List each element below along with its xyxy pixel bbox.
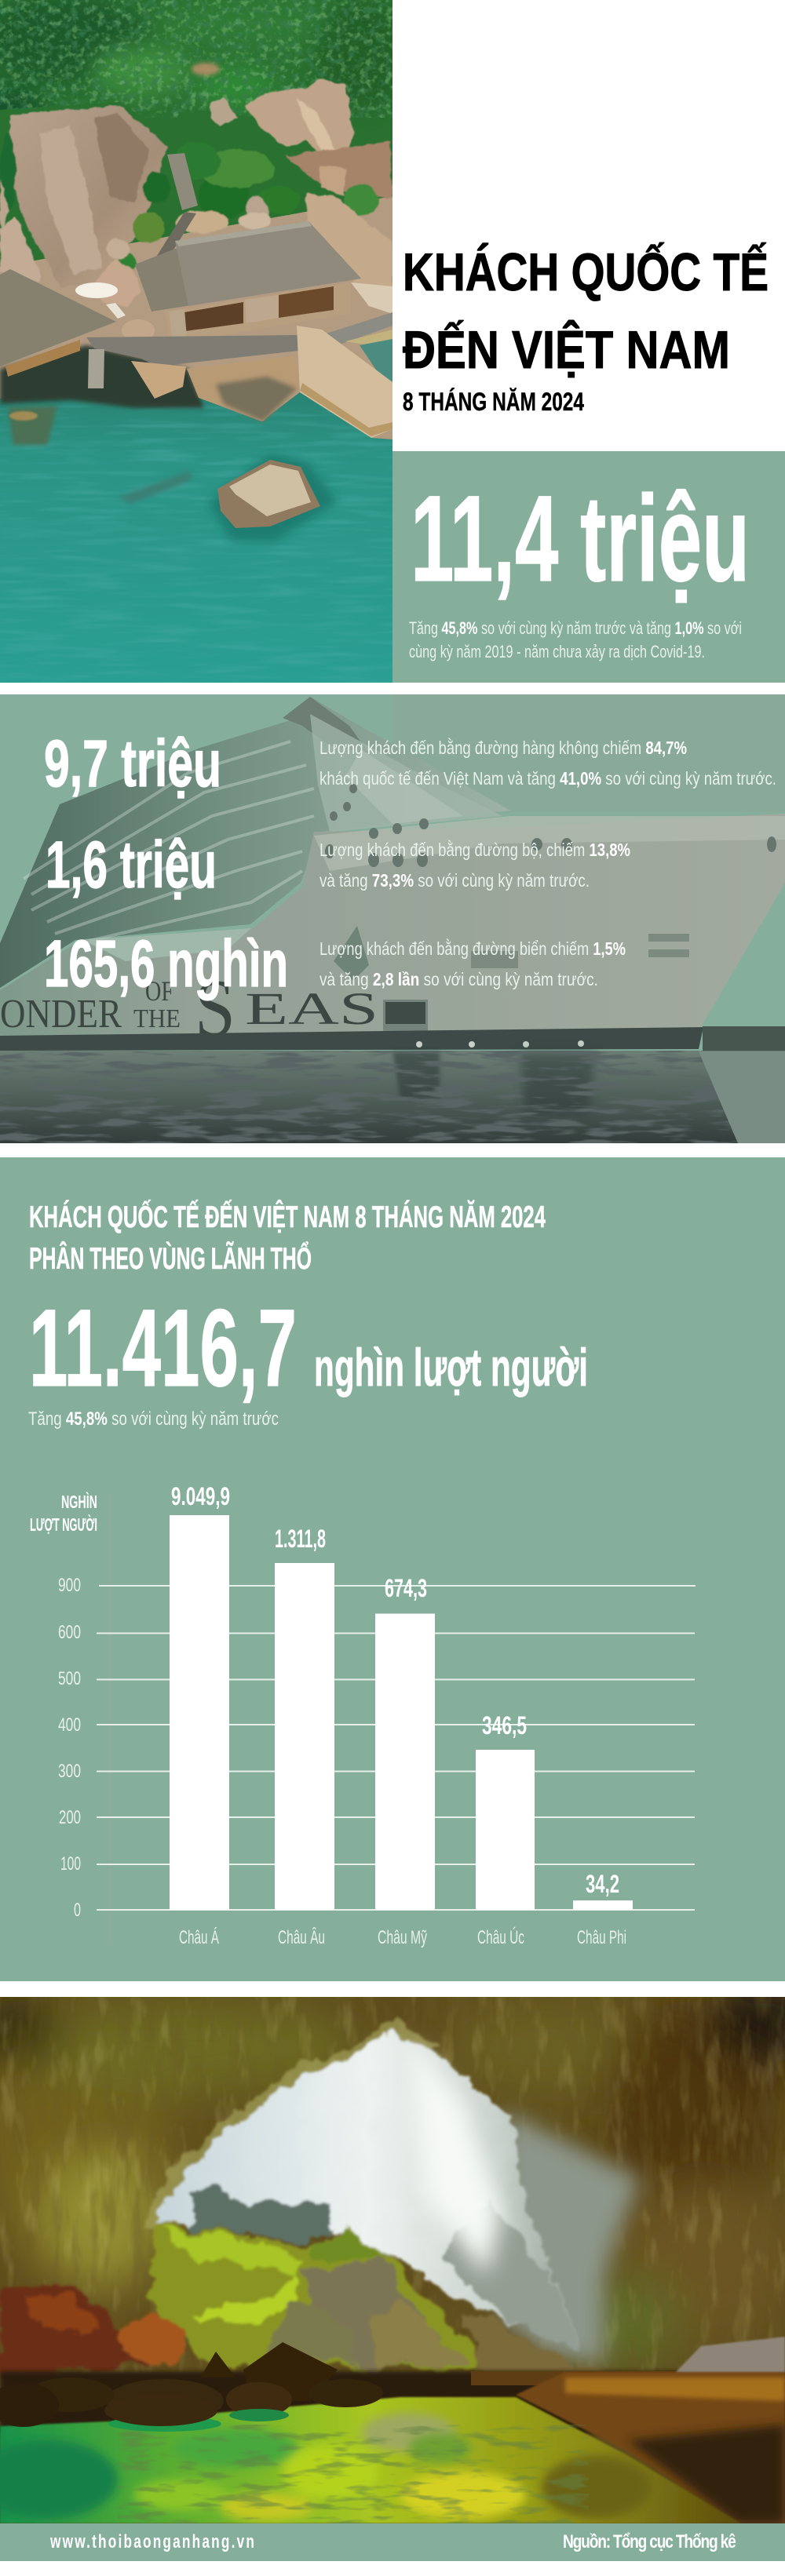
- y-axis labels: [58, 1575, 81, 1921]
- stat: sea arrivals: và tăng 2,8 lần so với cùng kỳ năm trước.: [319, 969, 598, 989]
- y-axis labels: 600: [58, 1622, 81, 1643]
- heading: main title: ĐẾN VIỆT NAM: [403, 319, 730, 380]
- axis unit label: NGHÌN: [61, 1491, 97, 1512]
- growth note: Tăng 45,8% so với cùng kỳ năm trước và tăng 1,0% so với: [409, 618, 742, 638]
- ship name: EAS: [245, 983, 378, 1034]
- bar: Châu Á: [170, 1482, 230, 1948]
- bar: Châu Mỹ: 674,3: [385, 1574, 427, 1602]
- ladder: [88, 349, 104, 388]
- bar: Châu Á: Châu Á: [179, 1927, 219, 1948]
- right floor: [516, 2372, 785, 2523]
- panel: title: [403, 242, 769, 416]
- website: www.thoibaonganhang.vn: [49, 2531, 254, 2552]
- rocks and vegetation, roughened: [0, 79, 392, 314]
- ship name: ONDER: [0, 992, 122, 1037]
- bar: Châu Úc: [476, 1711, 535, 1948]
- y-axis labels: 500: [58, 1668, 81, 1689]
- cave floor: [0, 2371, 785, 2434]
- bar: Châu Âu: 1.311,8: [275, 1525, 326, 1553]
- water: [0, 1051, 785, 1143]
- staircase: [167, 153, 198, 210]
- bar: Châu Phi: Châu Phi: [577, 1927, 626, 1948]
- rock base behind the villas: [0, 102, 392, 439]
- y-axis labels: 300: [58, 1761, 81, 1782]
- bar: Châu Úc: 346,5: [482, 1711, 527, 1740]
- cave interior rocks, roughened: [0, 2020, 601, 2380]
- growth note: Tăng 45,8% so với cùng kỳ năm trước: [28, 1408, 279, 1430]
- ship name: THE: [133, 1004, 181, 1033]
- photo: Son Doong cave: [0, 1985, 785, 2523]
- ship name: S: [195, 962, 236, 1054]
- ship name: [0, 962, 378, 1054]
- y-axis labels: 900: [58, 1575, 81, 1596]
- bar: Châu Âu: [275, 1525, 334, 1948]
- footer bar: [0, 2523, 785, 2561]
- deck: [86, 335, 298, 366]
- panel: arrivals by transport mode: [0, 694, 785, 1143]
- portholes: [325, 784, 776, 867]
- left thatched hut: [0, 269, 116, 366]
- thatched roof main house: [135, 221, 361, 312]
- bar: Châu Mỹ: Châu Mỹ: [378, 1927, 427, 1948]
- stat: sea arrivals: Lượng khách đến bằng đường biển chiếm 1,5%: [319, 938, 626, 959]
- stat: sea arrivals: 165,6 nghìn: [44, 927, 288, 1000]
- photo: cruise ship duotone: [0, 694, 785, 1143]
- bar: Châu Mỹ: [375, 1574, 435, 1948]
- dark under house: [0, 345, 204, 408]
- bar: Châu Phi: [573, 1870, 633, 1948]
- stat: sea arrivals: [44, 927, 626, 1000]
- deck stripes: [24, 741, 314, 942]
- bar: Châu Phi: 34,2: [586, 1870, 619, 1898]
- axis unit label: LƯỢT NGƯỜI: [30, 1514, 97, 1535]
- grey-green lit rock wall: [502, 2111, 641, 2365]
- big number: total: 11.416,7: [29, 1286, 297, 1409]
- ship name: OF: [145, 975, 173, 1007]
- boulders in water: [0, 2377, 383, 2432]
- bar: Châu Úc: Châu Úc: [477, 1927, 524, 1948]
- umbrella: [75, 282, 118, 298]
- stat: air arrivals: 9,7 triệu: [44, 727, 221, 800]
- heading: main title: [403, 242, 769, 380]
- waterline band: [0, 1027, 703, 1051]
- y-axis labels: 0: [74, 1900, 81, 1921]
- growth note: [409, 618, 742, 661]
- shoreline rocks: [131, 361, 186, 399]
- axis unit label: [30, 1491, 97, 1535]
- islet rock: [208, 454, 338, 541]
- submerged rock: [8, 406, 57, 445]
- stat: air arrivals: Lượng khách đến bằng đường hàng không chiếm 84,7%: [319, 738, 687, 758]
- bar: Châu Á: 9.049,9: [171, 1482, 230, 1510]
- dock: [703, 1026, 785, 1051]
- y-axis labels: 100: [60, 1853, 81, 1875]
- source: Nguồn: Tổng cục Thống kê: [563, 2530, 736, 2552]
- y-axis labels: 200: [59, 1807, 81, 1828]
- stat: road arrivals: và tăng 73,3% so với cùng kỳ năm trước.: [319, 870, 590, 891]
- right pale rock: [676, 2337, 785, 2372]
- subheading: period: 8 THÁNG NĂM 2024: [403, 388, 584, 416]
- stat: road arrivals: 1,6 triệu: [46, 828, 217, 902]
- panel: arrivals by region: [0, 1157, 785, 1981]
- reflecting water: [0, 2397, 741, 2523]
- stat: road arrivals: [46, 828, 630, 902]
- heading: chart title: [29, 1199, 546, 1276]
- y-axis labels: 400: [58, 1714, 81, 1736]
- stat: road arrivals: Lượng khách đến bằng đường bộ, chiếm 13,8%: [319, 840, 630, 860]
- house body: [165, 282, 351, 344]
- photo: resort on rocky coast: [0, 0, 408, 683]
- bar chart: [30, 1482, 696, 1948]
- stat: air arrivals: [44, 727, 776, 800]
- bar: Châu Âu: Châu Âu: [278, 1927, 325, 1948]
- heading: chart title: PHÂN THEO VÙNG LÃNH THỔ: [29, 1241, 312, 1276]
- hull door: [383, 1000, 428, 1042]
- panel: headline total: [392, 451, 785, 683]
- big number: total: nghìn lượt người: [314, 1338, 588, 1397]
